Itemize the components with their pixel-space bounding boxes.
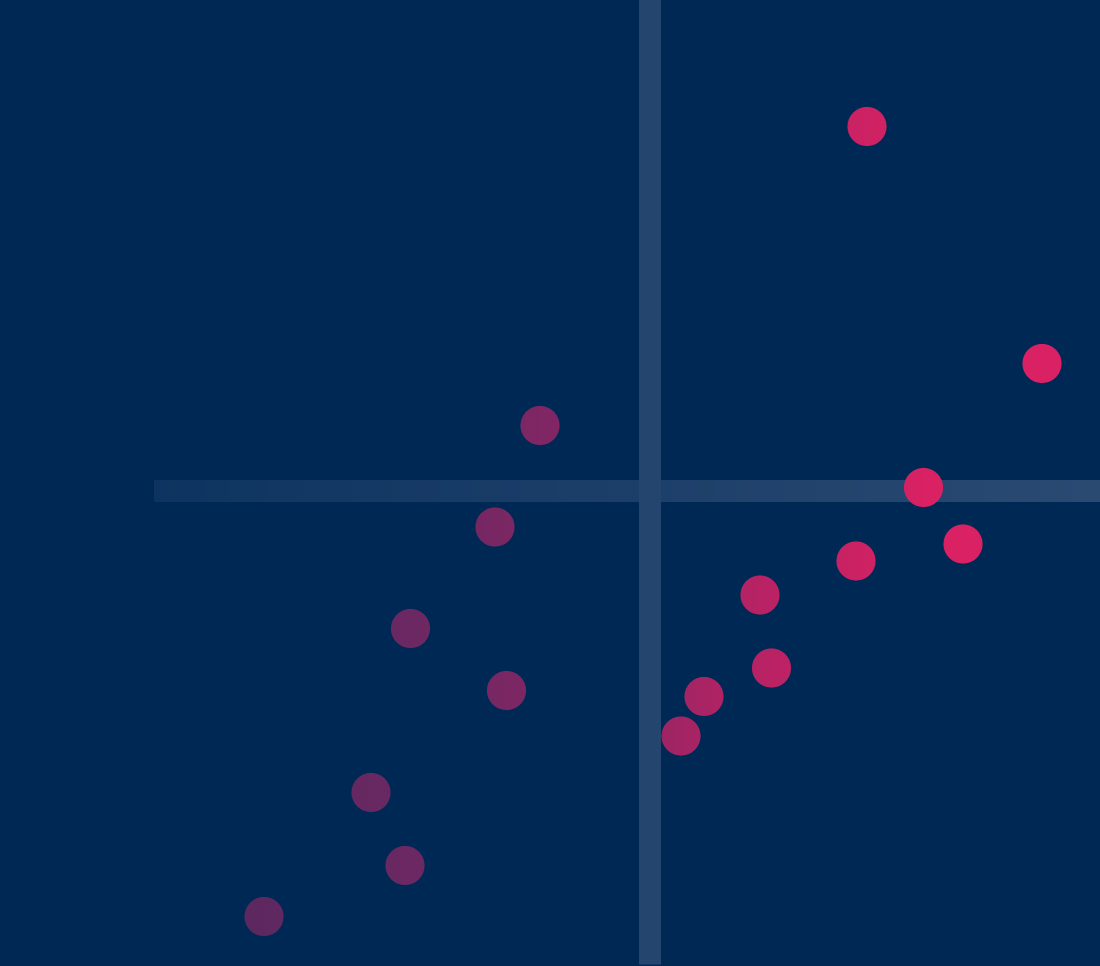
- point 15: [385, 846, 425, 885]
- point 14: [351, 773, 391, 812]
- point 16: [244, 897, 284, 936]
- data points: [244, 107, 1062, 936]
- point 10: [752, 648, 791, 688]
- point 8: [740, 575, 780, 615]
- point 5: [475, 507, 515, 547]
- point 12: [684, 677, 724, 716]
- point 7: [836, 541, 876, 581]
- point 3: [520, 406, 560, 445]
- point 6: [943, 524, 983, 564]
- horizontal axis bar: [154, 480, 1100, 502]
- point 4: [904, 468, 943, 507]
- vertical axis bar: [639, 0, 661, 964]
- point 13: [661, 716, 701, 756]
- point 11: [487, 671, 526, 710]
- point 9: [391, 609, 430, 648]
- point 1: [847, 107, 887, 146]
- point 2: [1022, 344, 1062, 383]
